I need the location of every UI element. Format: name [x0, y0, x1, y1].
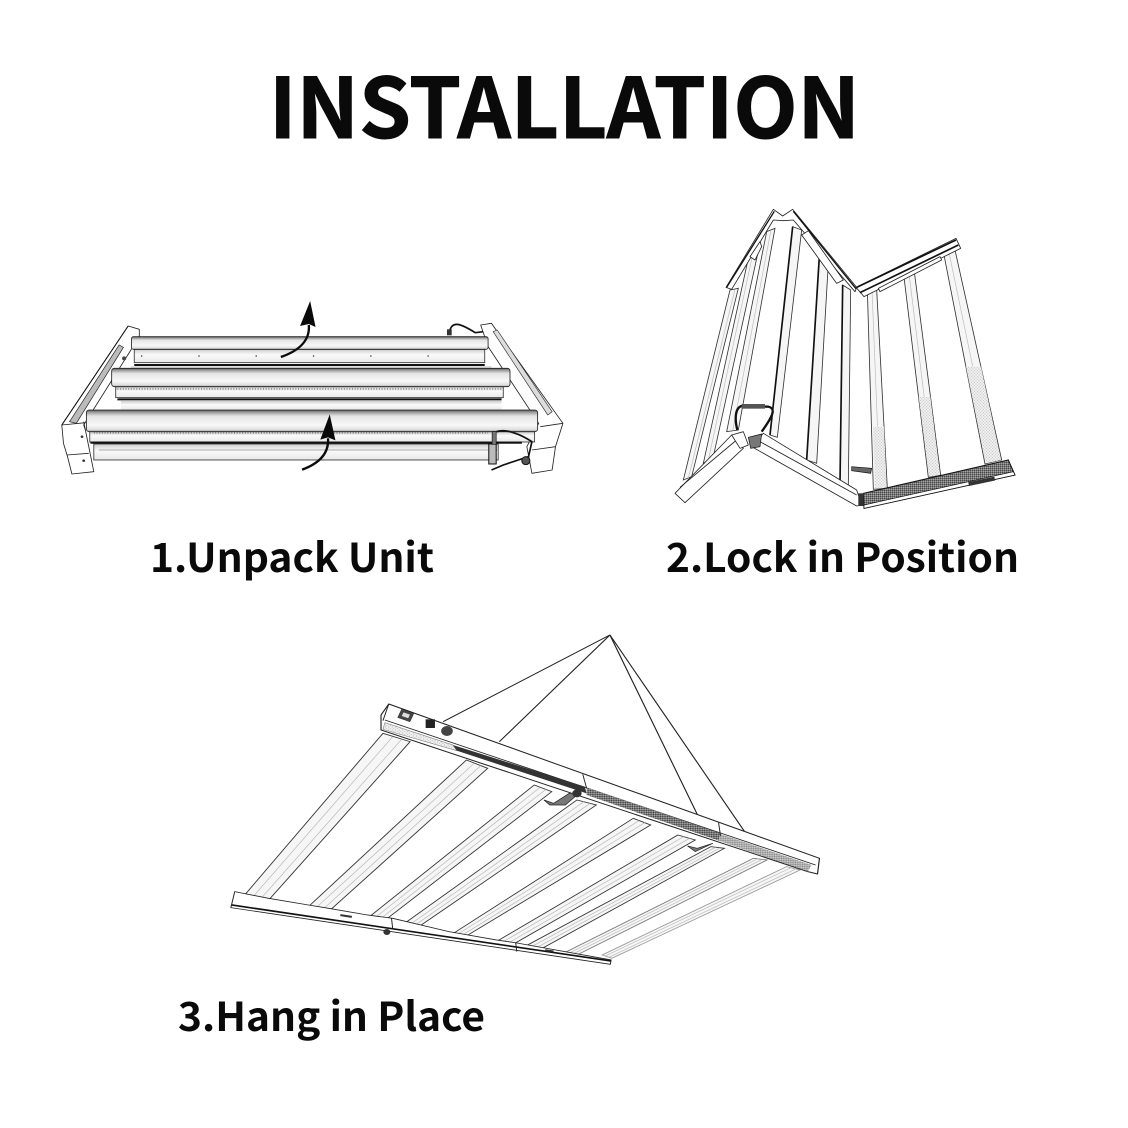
light bars	[243, 733, 800, 958]
middle tube	[112, 368, 510, 410]
right rail	[447, 323, 563, 473]
lower middle arm	[748, 433, 872, 506]
figure: folded unit with arrows	[62, 301, 563, 474]
figure: unfolding frame	[675, 209, 1015, 508]
label: step 3: 3.Hang in Place	[178, 985, 485, 1043]
left rail	[62, 326, 139, 474]
front tube	[86, 410, 538, 443]
speckled base bar	[858, 460, 1015, 508]
hanging brackets	[544, 789, 713, 852]
connector cable	[489, 431, 532, 470]
lower beam	[231, 892, 611, 964]
light bars	[683, 227, 1002, 489]
hanging wires	[443, 635, 747, 835]
handle	[736, 404, 773, 432]
bottom tube	[90, 443, 522, 460]
arrow: bottom	[302, 414, 335, 470]
figure: hanging fixture	[231, 635, 819, 964]
upper beam	[381, 704, 819, 874]
upper right beam	[856, 238, 961, 297]
arrow: top	[281, 301, 316, 357]
title: INSTALLATION	[269, 42, 860, 162]
top tube	[131, 337, 491, 368]
label: step 1: 1.Unpack Unit	[150, 526, 434, 584]
label: step 2: 2.Lock in Position	[666, 526, 1019, 584]
lower left arm	[675, 432, 748, 503]
upper left beam	[726, 209, 857, 292]
